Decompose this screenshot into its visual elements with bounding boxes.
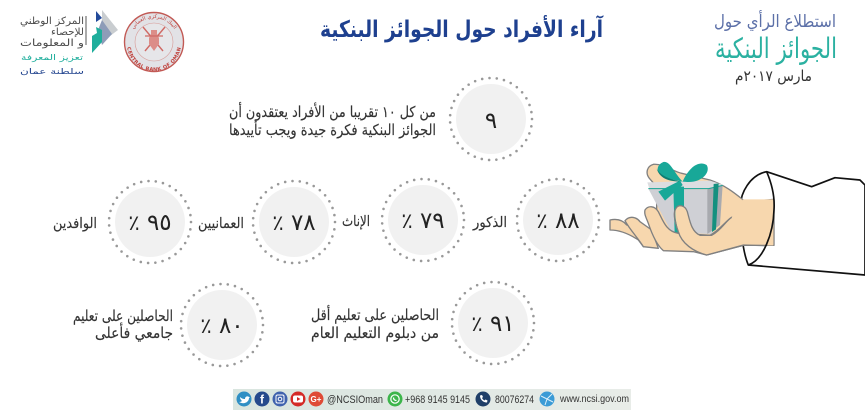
icon: facebook: f [260, 392, 265, 406]
phone number: 80076274 [495, 394, 534, 406]
whatsapp number: +968 9145 9145 [405, 394, 470, 406]
logo text: centre name [20, 16, 86, 49]
stat: 9 of 10: ٩ [485, 108, 497, 134]
label: الذكور [472, 215, 507, 231]
logo tagline: تعزيز المعرفة [21, 53, 83, 62]
stat: university and above: ٨٠ ٪ [200, 313, 244, 339]
icon: whatsapp [388, 392, 402, 406]
icon: google plus: G+ [311, 395, 322, 404]
label: الوافدين [53, 216, 97, 232]
icon: google plus [308, 392, 324, 406]
logo text: centre name: للإحصاء [51, 27, 84, 38]
stat: below general diploma [311, 282, 534, 364]
stat: expatriates: ٩٥ ٪ [128, 210, 172, 236]
stat text: من كل ١٠ تقريبا من الأفراد يعتقدون أن [229, 102, 436, 121]
fingers [610, 219, 652, 247]
social handle: @NCSIOman [327, 394, 383, 406]
logo: Central Bank of Oman seal: CENTRAL BANK OF OMAN [127, 47, 181, 71]
illustration: hand holding gift [610, 162, 865, 275]
footer contact bar [233, 389, 631, 410]
survey line: استطلاع الرأي حول [714, 10, 836, 32]
stat text: الجوائز البنكية فكرة جيدة ويجب تأييدها [229, 119, 436, 139]
survey date: مارس ٢٠١٧م [735, 67, 812, 85]
icon: facebook [254, 392, 270, 406]
stat: expatriates [53, 181, 191, 263]
stat: males [472, 179, 599, 261]
logo: Central Bank of Oman seal: البنك المركزي العماني [133, 14, 178, 29]
label: الحاصلين على تعليم [73, 307, 173, 325]
label: العمانيين [198, 216, 244, 232]
stat: 9 of 10 [229, 78, 532, 160]
stat: below general diploma: ٩١ ٪ [471, 311, 515, 337]
stat: Omanis: ٧٨ ٪ [272, 210, 316, 236]
logo mark [92, 10, 118, 53]
bow [658, 162, 683, 182]
website: www.ncsi.gov.om [559, 394, 629, 405]
label: من دبلوم التعليم العام [311, 324, 439, 342]
logo text: centre name: المركز الوطني [20, 16, 84, 27]
logo: NCSI [20, 10, 118, 76]
label [311, 305, 439, 342]
title: آراء الأفراد حول الجوائز البنكية [320, 14, 604, 43]
icon: twitter [236, 392, 252, 406]
stat: university and above [73, 284, 263, 366]
logo text: centre name: و المعلومات [20, 38, 84, 49]
label [73, 307, 173, 343]
icon: instagram [272, 392, 288, 406]
cuff [748, 172, 774, 265]
heading: survey block [714, 10, 837, 85]
stat: males: ٨٨ ٪ [536, 208, 580, 234]
stat: Omanis [198, 181, 335, 263]
stat text [229, 102, 436, 139]
gift box [647, 162, 723, 234]
label: الإناث [342, 214, 370, 230]
icon: globe [540, 392, 554, 406]
icon: youtube [290, 392, 306, 406]
icon: phone [476, 392, 490, 406]
hand back and thumb [647, 164, 774, 255]
label: جامعي فأعلى [95, 322, 173, 343]
label: الحاصلين على تعليم أقل [311, 305, 439, 324]
sleeve [741, 172, 865, 275]
stat: females [342, 179, 464, 261]
stat: females: ٧٩ ٪ [401, 208, 445, 234]
logo: Central Bank of Oman seal [124, 12, 184, 72]
logo country: سلطنة عمان [20, 67, 84, 76]
